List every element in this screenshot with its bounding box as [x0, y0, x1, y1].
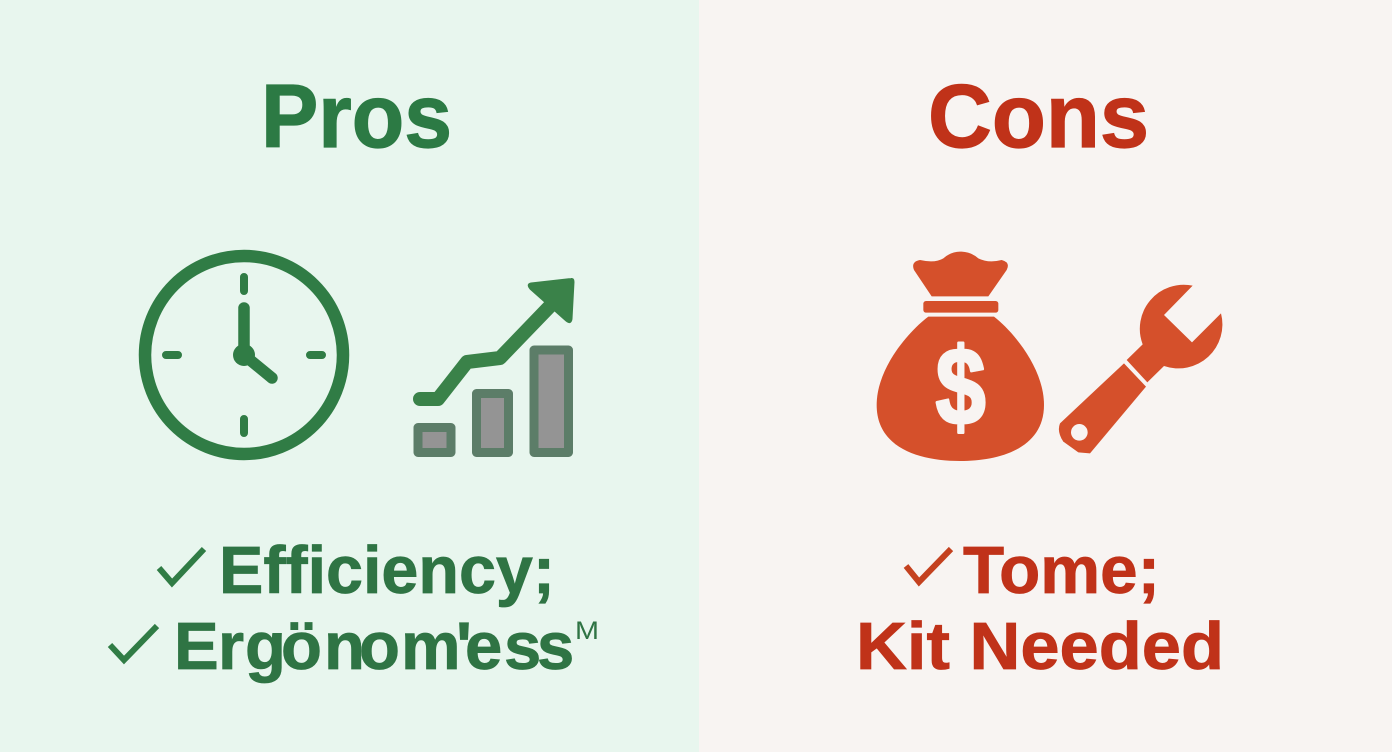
trend arrow	[420, 303, 553, 399]
cons background	[699, 0, 1392, 752]
check mark	[159, 549, 204, 583]
icon: rising bar chart with arrow	[418, 278, 574, 452]
panel: cons	[699, 0, 1392, 752]
superscript: M	[575, 617, 599, 645]
list item: Kit Needed: Kit Needed	[856, 609, 1224, 684]
label: Tome;	[963, 533, 1160, 608]
heading: Cons: Cons	[928, 67, 1149, 167]
bag top	[913, 252, 1008, 296]
bag body with dollar	[877, 317, 1044, 461]
wrench handle	[1059, 363, 1146, 453]
dollar sign: $	[936, 326, 986, 448]
label: Efficiency;	[219, 533, 555, 608]
list item: Tome	[906, 533, 1160, 608]
check mark	[906, 549, 951, 582]
list item: Ergonomess	[110, 609, 599, 684]
wrench head	[1127, 285, 1222, 382]
icon: money bag	[877, 252, 1044, 461]
label: Ergönom'ess	[174, 609, 574, 684]
bars	[418, 350, 568, 452]
list item: Efficiency	[159, 533, 555, 608]
check mark	[110, 626, 157, 660]
icon: wrench	[1059, 285, 1222, 453]
icon: clock	[145, 256, 343, 454]
pros background	[0, 0, 699, 752]
wrench hole	[1071, 424, 1088, 441]
panel: pros	[0, 0, 699, 752]
heading: Pros: Pros	[261, 67, 452, 167]
bag band	[923, 301, 998, 313]
